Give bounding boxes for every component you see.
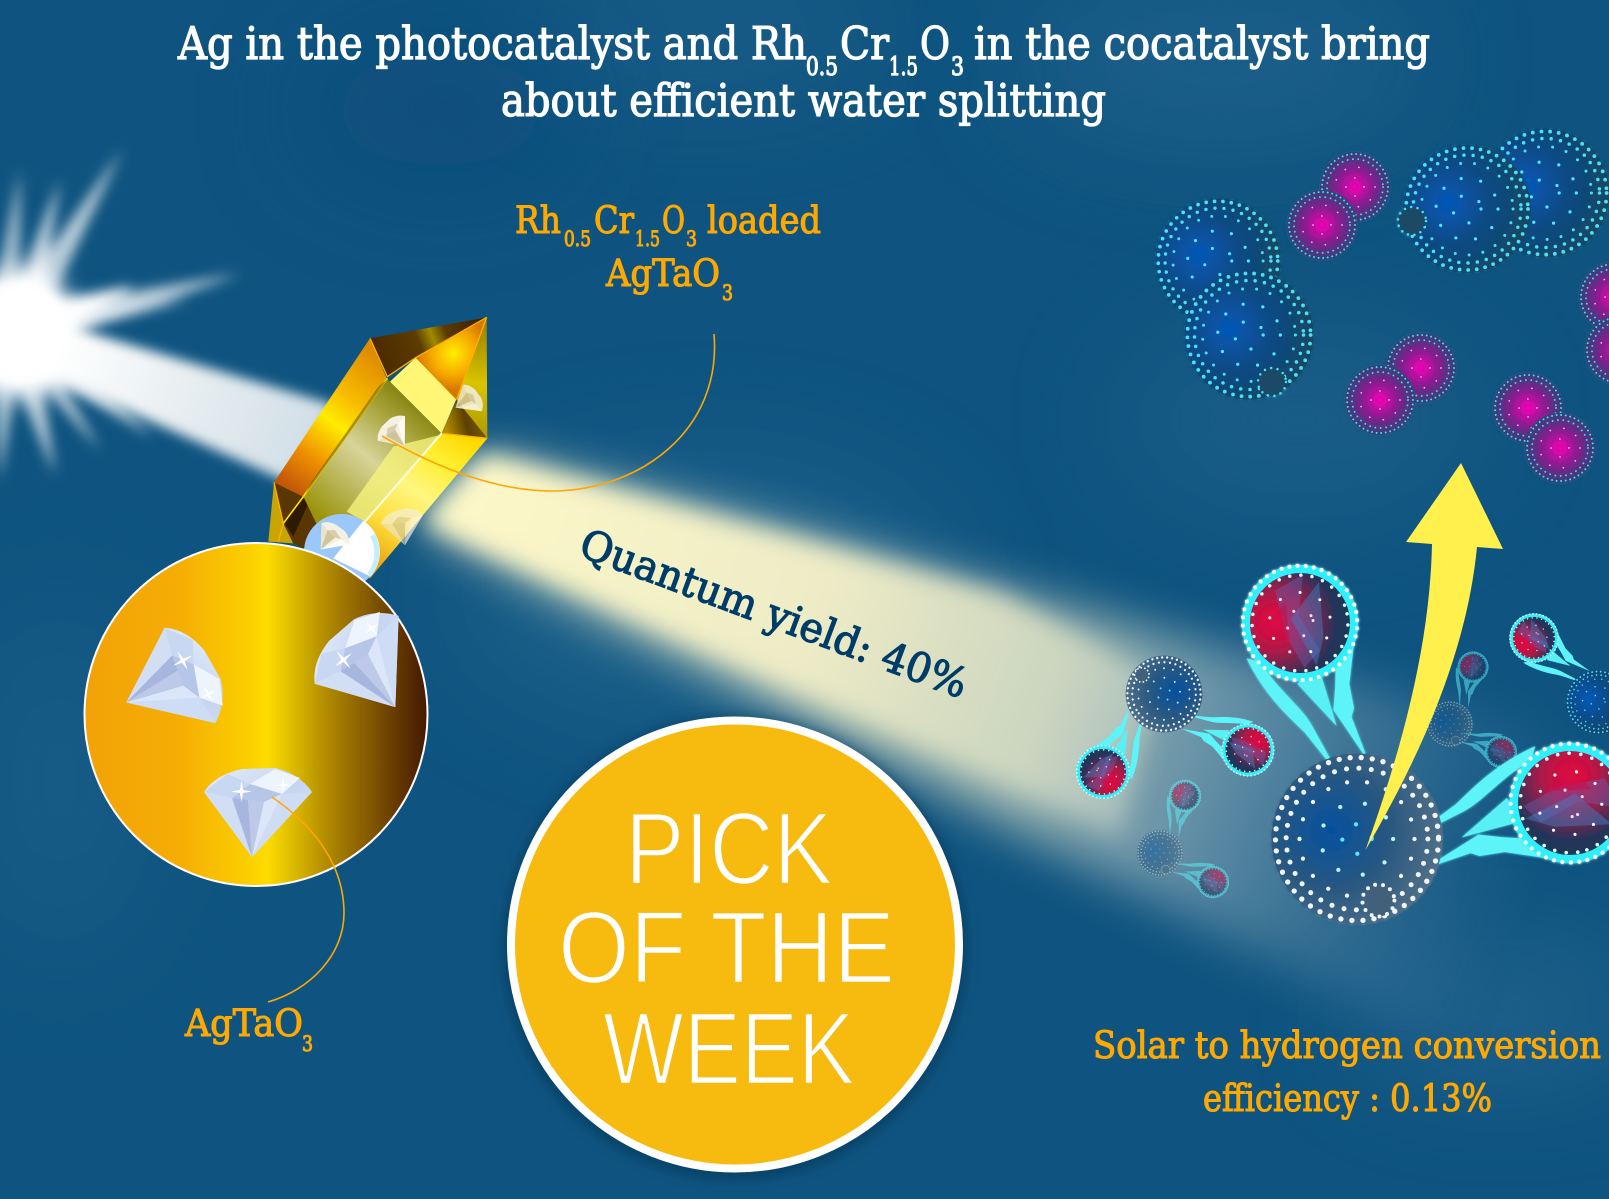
label: Rh0.5Cr1.5O3 loaded AgTaO3: Rh xyxy=(515,199,561,242)
title: Cr xyxy=(840,17,889,70)
title: in the cocatalyst bring xyxy=(974,17,1430,70)
badge: pick of the week xyxy=(503,716,967,1180)
oxygen molecules, blue pairs xyxy=(1155,128,1609,400)
label: Rh0.5Cr1.5O3 loaded AgTaO3: loaded xyxy=(707,199,821,242)
yellow light beam xyxy=(423,455,1609,1135)
hydrogen molecules, magenta pairs xyxy=(1287,152,1609,483)
title: 0.5 xyxy=(806,52,838,81)
diamond bottom xyxy=(204,768,312,857)
diamond left xyxy=(104,616,238,755)
diamond right xyxy=(299,596,442,737)
label: AgTaO3: 3 xyxy=(302,1032,313,1056)
diamonds inside crystal xyxy=(308,381,488,561)
water molecule, large central xyxy=(1231,556,1609,925)
water molecule, right xyxy=(1499,604,1609,734)
leader line to prism label xyxy=(382,334,715,491)
solar to hydrogen efficiency text: efficiency : 0.13% xyxy=(1203,1077,1492,1120)
title: O xyxy=(920,17,950,70)
leader line to AgTaO3 label xyxy=(268,797,344,1002)
badge: pick of the week: OF THE xyxy=(558,890,895,1005)
solar to hydrogen efficiency text xyxy=(1093,1024,1601,1120)
label: AgTaO3: AgTaO xyxy=(184,1002,303,1045)
water molecules, faint xyxy=(1137,647,1523,903)
beam label: quantum yield: Quantum yield: 40% xyxy=(573,519,974,708)
title: Ag in the photocatalyst and Rh xyxy=(177,17,807,70)
water molecule, left xyxy=(1066,642,1284,810)
label: Rh0.5Cr1.5O3 loaded AgTaO3: O xyxy=(662,199,685,242)
arrow: upward yellow xyxy=(1366,463,1503,850)
title: 1.5 xyxy=(889,52,918,81)
title: 3 xyxy=(951,52,964,81)
badge: pick of the week: WEEK xyxy=(603,991,855,1106)
blue sphere behind the crystal xyxy=(304,514,380,589)
title xyxy=(177,17,1430,127)
title: about efficient water splitting xyxy=(501,74,1106,127)
badge: pick of the week: PICK xyxy=(625,791,833,906)
prism crystal: Rh0.5Cr1.5O3 loaded AgTaO3 xyxy=(268,317,488,589)
label: Rh0.5Cr1.5O3 loaded AgTaO3: 0.5 xyxy=(564,227,591,251)
label: Rh0.5Cr1.5O3 loaded AgTaO3: Cr xyxy=(594,199,634,242)
label: Rh0.5Cr1.5O3 loaded AgTaO3: AgTaO xyxy=(605,252,720,295)
label: Rh0.5Cr1.5O3 loaded AgTaO3: 1.5 xyxy=(635,227,660,251)
AgTaO3 particle sphere xyxy=(84,543,442,886)
label: Rh0.5Cr1.5O3 loaded AgTaO3 xyxy=(515,199,821,305)
label: Rh0.5Cr1.5O3 loaded AgTaO3: 3 xyxy=(686,227,697,251)
sun with rays xyxy=(0,150,335,484)
label: Rh0.5Cr1.5O3 loaded AgTaO3: 3 xyxy=(722,281,733,305)
